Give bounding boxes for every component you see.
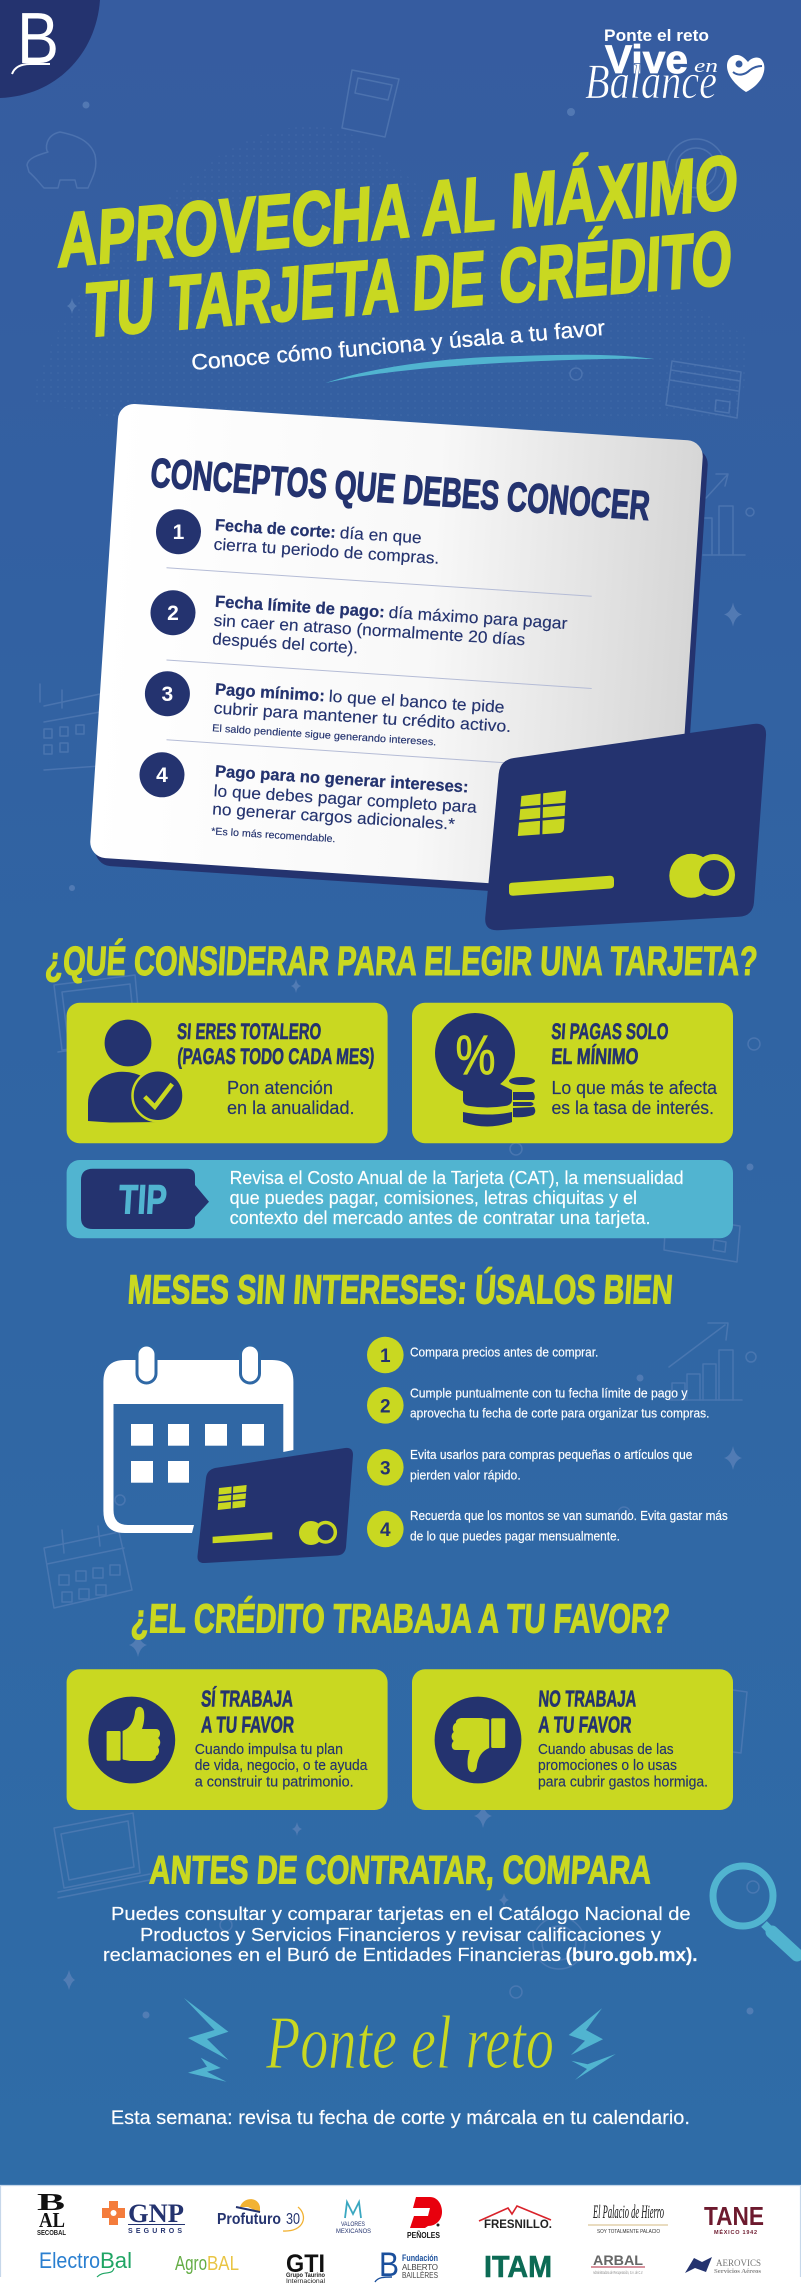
campaign logo: Vive en Balance: Vive xyxy=(605,38,688,82)
tip badge xyxy=(81,1169,209,1229)
logo: Profuturo: Profuturo xyxy=(217,2211,281,2228)
logo: ITAM: ITAM xyxy=(484,2249,552,2284)
subtitle: Conoce cómo funciona y úsala a tu favor xyxy=(190,315,606,375)
panel: conceptos xyxy=(89,403,709,903)
text: reto semanal: Esta semana: revisa tu fecha de corte y márcala en tu calendario. xyxy=(111,2107,690,2129)
step 4 xyxy=(367,1508,728,1547)
logo: Fundacion: BAILLÈRES xyxy=(402,2271,438,2280)
campaign logo: Vive en Balance: Ponte el reto xyxy=(604,26,709,45)
concept 2: sin caer en atraso (normalmente 20 días xyxy=(213,612,526,649)
step 3: pierden valor rápido. xyxy=(410,1467,521,1482)
icon: small credit card xyxy=(197,1448,353,1563)
logo: Aerovics: Servicios Aéreos xyxy=(714,2268,761,2275)
logo: Profuturo: 30 xyxy=(286,2211,300,2228)
logo: GTI: Internacional xyxy=(286,2279,325,2285)
step 2: Cumple puntualmente con tu fecha límite de pago y xyxy=(410,1386,688,1401)
background dot mesh xyxy=(30,126,750,420)
concept 2: día máximo para pagar xyxy=(388,604,568,633)
logo: TANE: TANE xyxy=(704,2201,764,2231)
icon: lightning right xyxy=(569,2008,616,2080)
icon: person with check xyxy=(88,1020,184,1122)
campaign logo: Vive en Balance: en xyxy=(694,56,718,77)
logo: GTI: Grupo Taurino xyxy=(286,2273,325,2279)
logo: Palacio de Hierro: SOY TOTALMENTE PALACIO xyxy=(597,2229,661,2235)
logo: Peñoles xyxy=(407,2197,442,2240)
step 1: Compara precios antes de comprar. xyxy=(410,1345,598,1360)
title xyxy=(56,138,740,354)
logo: Valores Mexicanos xyxy=(336,2202,372,2235)
concept 4 xyxy=(140,752,478,845)
icon: heart xyxy=(727,55,764,92)
step 2: aprovecha tu fecha de corte para organizar tus compras. xyxy=(410,1406,709,1421)
logo: GNP xyxy=(102,2199,185,2235)
logo: Palacio de Hierro xyxy=(588,2202,668,2235)
tip text: contexto del mercado antes de contratar una tarjeta. xyxy=(230,1208,651,1228)
footer: logos: El Palacio de Hierro xyxy=(593,2202,664,2223)
tip text: que puedes pagar, comisiones, letras chiquitas y el xyxy=(230,1188,637,1208)
paragraph: catalogo xyxy=(103,1904,698,1965)
list: meses sin intereses xyxy=(367,1337,728,1547)
panel: si trabaja: A TU FAVOR xyxy=(200,1712,295,1738)
step 1: 1 xyxy=(380,1346,391,1367)
tip text: Revisa el Costo Anual de la Tarjeta (CAT), la mensualidad xyxy=(230,1168,684,1188)
paragraph: catalogo: reclamaciones en el Buró de Entidades Financieras xyxy=(103,1945,561,1965)
panel: pago minimo xyxy=(412,1003,733,1143)
concept 4: no generar cargos adicionales.* xyxy=(212,800,456,834)
icon: percent bulb and coins: % xyxy=(456,1023,496,1086)
logo: ElectroBal xyxy=(39,2248,132,2277)
panel: pago minimo: EL MÍNIMO xyxy=(551,1044,639,1069)
concept 1: 1 xyxy=(173,521,185,544)
panel: si trabaja: a construir tu patrimonio. xyxy=(195,1775,354,1791)
step 2: 2 xyxy=(380,1396,391,1417)
panel: pago minimo: SI PAGAS SOLO xyxy=(551,1019,669,1044)
concept 3: 3 xyxy=(162,683,173,706)
panel: no trabaja: Cuando abusas de las xyxy=(538,1742,674,1758)
logo: Secobal: AL xyxy=(39,2208,65,2232)
step 4: Recuerda que los montos se van sumando. Evita gastar más xyxy=(410,1508,728,1523)
heading: ponte el reto: Ponte el reto xyxy=(265,2001,554,2085)
concept 1 xyxy=(156,509,440,568)
tip badge: TIP xyxy=(117,1176,168,1222)
logo: Fundacion: B xyxy=(379,2246,399,2284)
concept 4: lo que debes pagar completo para xyxy=(213,782,478,817)
logo: Peñoles: PEÑOLES xyxy=(407,2231,441,2240)
logo: Fundacion: ALBERTO xyxy=(402,2263,438,2272)
concept 1: día en que xyxy=(339,524,422,547)
step 4: 4 xyxy=(380,1520,391,1541)
brand logo letter: B xyxy=(17,0,59,79)
logo: Arbal: Administradora de Recuperación, S.A. de C.V. xyxy=(593,2270,643,2275)
logo: Arbal: ARBAL xyxy=(593,2252,643,2268)
concept 3: lo que el banco te pide xyxy=(328,688,505,717)
panel: si trabaja: SÍ TRABAJA xyxy=(200,1685,294,1712)
concept 1: Fecha de corte: xyxy=(214,516,336,542)
panel: si trabaja: Cuando impulsa tu plan xyxy=(195,1742,343,1758)
panel: totalero xyxy=(67,1003,388,1143)
logo: Secobal: B xyxy=(37,2190,65,2216)
panel: totalero: en la anualidad. xyxy=(227,1098,354,1118)
panel: no trabaja: A TU FAVOR xyxy=(538,1712,633,1738)
panel: no trabaja: para cubrir gastos hormiga. xyxy=(538,1775,708,1791)
logo: GNP: GNP xyxy=(128,2199,184,2228)
logo: Valores Mexicanos: MEXICANOS xyxy=(336,2228,372,2235)
logo: Arbal xyxy=(591,2252,645,2275)
logo: Aerovics: AEROVICS xyxy=(716,2259,761,2269)
subtitle swoosh xyxy=(326,355,654,383)
footer: logos xyxy=(0,2185,801,2294)
concept 2: después del corte). xyxy=(212,630,359,657)
logo: Valores Mexicanos: VALORES xyxy=(341,2221,366,2228)
logo: ElectroBal: Electro xyxy=(39,2248,100,2273)
concept 3: Pago mínimo: xyxy=(214,681,325,705)
panel: si trabaja: de vida, negocio, o te ayuda xyxy=(195,1758,368,1774)
dividers xyxy=(166,568,592,763)
step 3: 3 xyxy=(380,1458,391,1479)
step 4: de lo que puedes pagar mensualmente. xyxy=(410,1529,620,1544)
step 3: Evita usarlos para compras pequeñas o artículos que xyxy=(410,1447,692,1462)
panel: pago minimo: Lo que más te afecta xyxy=(552,1078,718,1098)
logo: Fundacion xyxy=(375,2246,438,2284)
step 3 xyxy=(367,1447,692,1486)
concept 4: Pago para no generar intereses: xyxy=(214,763,469,796)
paragraph: catalogo: Puedes consultar y comparar tarjetas en el Catálogo Nacional de xyxy=(111,1904,691,1924)
panel: no trabaja xyxy=(412,1669,733,1810)
icon: magnifier xyxy=(713,1866,797,1955)
panel: si trabaja xyxy=(67,1669,388,1810)
campaign logo: Vive en Balance xyxy=(585,26,764,109)
panel: tip xyxy=(67,1160,733,1238)
logo: Fundacion: Fundación xyxy=(402,2253,438,2263)
paragraph: catalogo: (buro.gob.mx). xyxy=(566,1945,698,1965)
logo: Secobal: SECOBAL xyxy=(37,2228,66,2237)
panel: pago minimo: es la tasa de interés. xyxy=(552,1098,714,1118)
logo: Aerovics xyxy=(685,2257,761,2275)
concept 3: El saldo pendiente sigue generando intereses. xyxy=(212,723,437,748)
background icons xyxy=(27,70,760,2018)
panel: totalero: SI ERES TOTALERO xyxy=(177,1019,322,1044)
logo: Fresnillo xyxy=(479,2206,552,2231)
icon: calendar xyxy=(103,1345,293,1533)
logo: GNP: SEGUROS xyxy=(128,2228,182,2235)
paragraph: catalogo: Productos y Servicios Financieros y revisar calificaciones y xyxy=(140,1925,661,1945)
logo: Secobal xyxy=(37,2190,66,2237)
icon: thumbs down xyxy=(435,1697,521,1783)
concept 2 xyxy=(150,590,568,657)
logo: AgroBAL: Agro xyxy=(175,2253,207,2275)
concept 4: 4 xyxy=(156,764,168,787)
concept 3 xyxy=(145,671,512,748)
logo: AgroBAL: BAL xyxy=(207,2253,239,2275)
panel: totalero: (PAGAS TODO CADA MES) xyxy=(177,1044,375,1069)
step 1 xyxy=(367,1337,598,1373)
concept 2: Fecha límite de pago: xyxy=(214,593,385,621)
panel: totalero: Pon atención xyxy=(227,1078,333,1098)
concept 2: 2 xyxy=(167,602,179,625)
step 2 xyxy=(367,1386,709,1424)
logo: Profuturo xyxy=(217,2199,303,2231)
concept 1: cierra tu periodo de compras. xyxy=(213,536,440,568)
icon: credit card xyxy=(485,724,766,930)
campaign logo: Vive en Balance: Balance xyxy=(585,53,717,109)
logo: TANE: MÉXICO 1942 xyxy=(714,2228,757,2236)
panel: no trabaja: promociones o lo usas xyxy=(538,1758,677,1774)
corner brand tab xyxy=(0,0,100,98)
logo: Fresnillo: FRESNILLO. xyxy=(484,2219,552,2231)
panel: no trabaja: NO TRABAJA xyxy=(538,1686,637,1712)
icon: lightning left xyxy=(184,1998,228,2082)
concept 4: *Es lo más recomendable. xyxy=(211,826,336,845)
tip text xyxy=(230,1168,684,1228)
logo: AgroBAL xyxy=(175,2253,239,2275)
logo: GTI: GTI xyxy=(286,2250,325,2278)
logo: ElectroBal: Bal xyxy=(100,2248,132,2273)
icon: thumbs up xyxy=(88,1697,175,1783)
icon: percent bulb and coins xyxy=(435,1013,535,1126)
concept 3: cubrir para mantener tu crédito activo. xyxy=(213,699,512,736)
